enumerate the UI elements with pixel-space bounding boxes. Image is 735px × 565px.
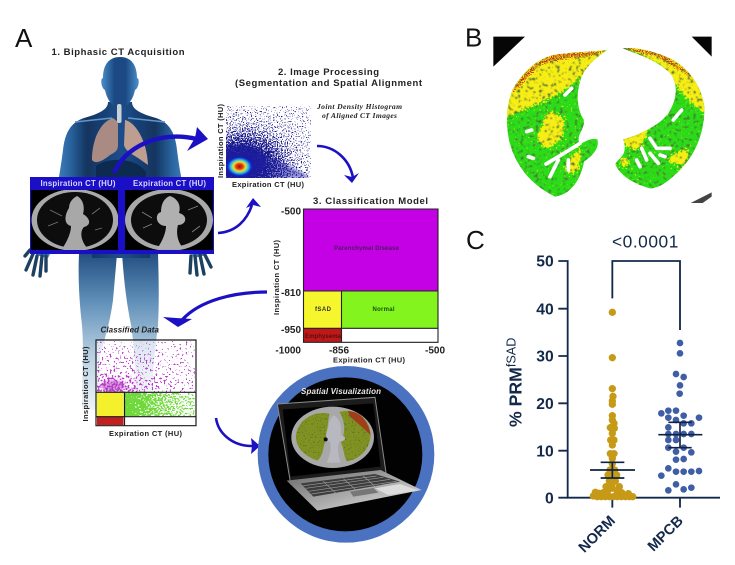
- spatial visualization circle: [258, 366, 434, 543]
- CT image panel: [30, 177, 214, 254]
- panel letter B: B: [465, 22, 482, 52]
- y axis title: fSAD: [505, 338, 519, 367]
- heading: image processing: 2. Image Processing: [278, 67, 379, 78]
- y axis tick labels: [536, 254, 554, 507]
- dark vessel texture: [507, 48, 704, 196]
- head: [101, 57, 139, 108]
- panel A: CT workflow: [15, 23, 445, 543]
- classified data title: Classified Data: [100, 326, 160, 334]
- region labels: Normal: [372, 307, 395, 313]
- laptop lid: [277, 397, 386, 484]
- body legs: [79, 254, 159, 410]
- emphysema cluster: [97, 417, 124, 425]
- keyboard: [301, 474, 400, 497]
- parenchymal disease region: [304, 209, 438, 291]
- laptop: [277, 397, 422, 511]
- classification x axis label: Expiration CT (HU): [333, 356, 406, 364]
- spatial visualization title: Spatial Visualization: [301, 387, 381, 396]
- heading: image processing: [235, 67, 423, 89]
- inspiration CT label: Inspiration CT (HU): [40, 179, 116, 188]
- lung left anatomy: [92, 118, 118, 162]
- joint density histogram caption: Joint Density Histogram: [316, 102, 402, 111]
- joint density histogram caption: [316, 102, 402, 120]
- heading: image processing: (Segmentation and Spatial Alignment: [235, 78, 423, 89]
- image corners: [493, 37, 712, 203]
- normal region: [342, 291, 438, 328]
- classification axis ticks: [275, 206, 445, 356]
- MPCB mean and error bars: [658, 422, 702, 448]
- arrow: model to classified data: [163, 292, 267, 327]
- classification axis ticks: -856: [329, 346, 349, 356]
- laptop base: [287, 470, 422, 511]
- arrow: CT to classification step: [218, 198, 261, 233]
- joint density histogram caption: of Aligned CT Images: [322, 111, 397, 120]
- region labels: Emphysema: [305, 334, 342, 340]
- classification axis ticks: -500: [425, 346, 445, 356]
- scatter frame: [96, 340, 196, 426]
- laptop screen CT: [283, 404, 380, 476]
- emphysema region: [304, 328, 342, 342]
- region labels: fSAD: [315, 307, 332, 313]
- panel letter A: A: [15, 23, 33, 53]
- p value: <0.0001: [612, 232, 678, 252]
- y axis tick labels: 30: [536, 349, 554, 366]
- lung right anatomy: [124, 120, 148, 165]
- y axis: [558, 261, 720, 508]
- human body figure: [25, 57, 211, 410]
- NORM dots: [590, 309, 636, 500]
- classification axis ticks: -1000: [275, 346, 301, 356]
- blue ring: [258, 366, 434, 543]
- trachea: [117, 104, 122, 123]
- yellow fSAD areas: [503, 43, 708, 175]
- classified data x axis label: Expiration CT (HU): [109, 429, 182, 438]
- arrow: classified data to visualization: [216, 418, 260, 454]
- panel B: lung map: [465, 22, 712, 203]
- joint density histogram plot: [226, 106, 311, 178]
- y axis tick labels: 40: [536, 301, 554, 318]
- lung parenchyma: [506, 48, 704, 197]
- arrow: histogram to classification model: [317, 146, 359, 183]
- classification model chart: [304, 209, 438, 342]
- touchpad: [375, 484, 418, 495]
- panel C: dot plot: [466, 225, 720, 556]
- fSAD cluster: [97, 393, 124, 416]
- panel letter C: C: [466, 225, 485, 255]
- diaphragm shadow: [96, 160, 146, 177]
- significance bracket: [612, 261, 680, 330]
- heading: classification model: 3. Classification Model: [313, 196, 428, 207]
- classification axis ticks: -500: [281, 206, 301, 218]
- empty scatter cell: [125, 417, 195, 425]
- region labels: [305, 246, 400, 340]
- body torso and arms: [36, 102, 206, 258]
- left hand: [25, 250, 46, 276]
- histogram x axis label: Expiration CT (HU): [232, 180, 304, 189]
- classification y axis label: Inspiration CT (HU): [272, 240, 281, 315]
- white airways: [527, 88, 682, 177]
- chart frame and dividers: [304, 209, 438, 342]
- y axis tick labels: 20: [536, 396, 554, 413]
- inspiration CT scan: [31, 189, 118, 251]
- heading: biphasic CT acquisition: 1. Biphasic CT Acquisition: [52, 47, 185, 58]
- region labels: Parenchymal Disease: [334, 246, 400, 252]
- classified data scatter: [96, 340, 196, 426]
- y axis tick labels: 50: [536, 254, 554, 271]
- chart: [505, 232, 720, 556]
- histogram y axis label: Inspiration CT (HU): [216, 104, 225, 178]
- right hand: [190, 253, 211, 275]
- collarbone highlight: [75, 118, 165, 122]
- MPCB dots: [658, 340, 702, 494]
- blue frame: [30, 177, 214, 254]
- classification axis ticks: -810: [281, 288, 301, 299]
- expiration CT label: Expiration CT (HU): [133, 179, 206, 188]
- y axis tick labels: 10: [536, 443, 554, 460]
- MPCB label: MPCB: [645, 513, 687, 555]
- classification axis ticks: -950: [281, 325, 301, 336]
- red air-trapping edge: [510, 47, 693, 95]
- NORM label: NORM: [576, 513, 619, 556]
- NORM mean and error bars: [590, 462, 635, 478]
- fSAD region: [304, 291, 342, 328]
- empty region: [342, 328, 438, 342]
- lung image: [493, 37, 712, 203]
- y axis tick labels: 0: [545, 490, 554, 507]
- black disc: [268, 377, 422, 531]
- expiration CT scan: [125, 189, 213, 251]
- y axis title: % PRM: [505, 367, 525, 427]
- arrow: body to histogram: [114, 127, 208, 173]
- classified data y axis label: Inspiration CT (HU): [81, 346, 90, 422]
